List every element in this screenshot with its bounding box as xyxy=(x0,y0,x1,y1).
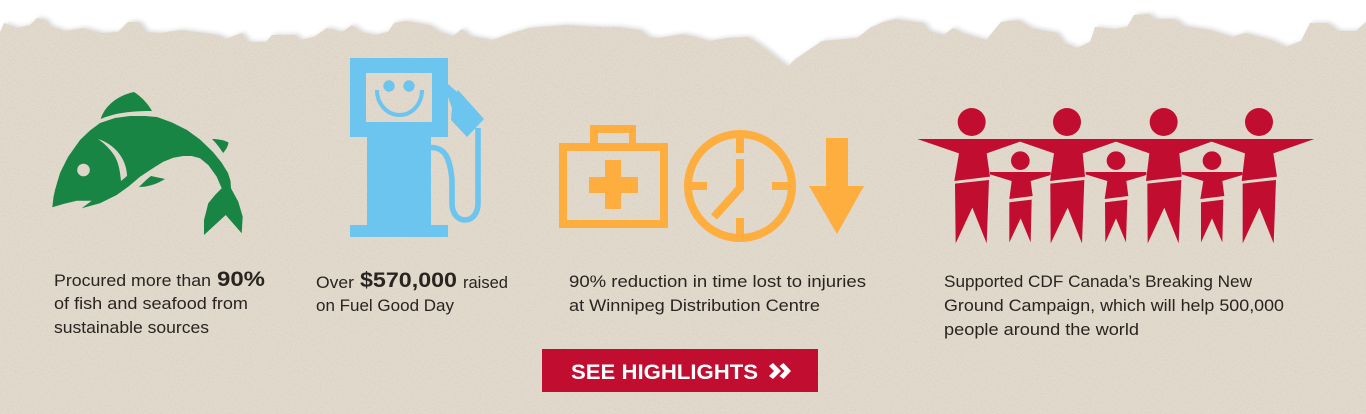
text: fuel good day xyxy=(316,269,508,315)
button: see highlights xyxy=(542,349,818,392)
text: fish and seafood xyxy=(54,268,265,337)
tail-side fin xyxy=(212,139,228,153)
child legs xyxy=(1009,200,1223,242)
text: CDF Canada campaign: Supported CDF Canada’s Breaking New xyxy=(944,273,1252,291)
fish eye xyxy=(77,164,90,176)
text: fish and seafood: 90% xyxy=(217,268,265,291)
text: CDF Canada campaign xyxy=(944,273,1284,339)
text: injury reduction: at Winnipeg Distribution Centre xyxy=(569,297,820,315)
text: injury reduction: 90% reduction in time lost to injuries xyxy=(569,273,866,291)
pump eyes xyxy=(383,80,415,92)
pump nozzle xyxy=(448,84,484,137)
text: fish and seafood: Procured more than xyxy=(54,272,211,290)
icon: green fish xyxy=(52,92,243,235)
kit cross xyxy=(589,160,638,209)
text: CDF Canada campaign: people around the world xyxy=(944,321,1139,339)
pump hose xyxy=(431,128,478,220)
button: see highlights: SEE HIGHLIGHTS xyxy=(571,361,758,384)
child torsos and arms xyxy=(990,172,1242,199)
icon: smiling fuel pump xyxy=(350,58,484,237)
pump smile xyxy=(377,90,422,115)
text: fuel good day: on Fuel Good Day xyxy=(316,297,455,315)
adult legs xyxy=(955,180,1276,243)
text: fuel good day: raised xyxy=(463,274,508,292)
dorsal fin xyxy=(101,92,152,119)
adult torsos and arms xyxy=(917,139,1314,181)
text: fish and seafood: of fish and seafood from xyxy=(54,295,248,313)
icon: double chevron xyxy=(769,363,791,379)
child heads xyxy=(1011,151,1221,170)
fish gill xyxy=(98,139,127,181)
text: CDF Canada campaign: Ground Campaign, which will help 500,000 xyxy=(944,297,1284,315)
icon: clock xyxy=(688,134,792,238)
adult heads xyxy=(958,108,1273,136)
text: fuel good day: Over xyxy=(316,274,355,292)
icon: first aid kit xyxy=(559,125,668,228)
belly fin xyxy=(139,176,165,187)
icon: row of adults and children holding hands xyxy=(917,108,1314,243)
icon: down arrow xyxy=(809,138,864,234)
text: fish and seafood: sustainable sources xyxy=(54,319,209,337)
text: fuel good day: $570,000 xyxy=(360,269,457,292)
text: injury reduction xyxy=(569,273,866,315)
